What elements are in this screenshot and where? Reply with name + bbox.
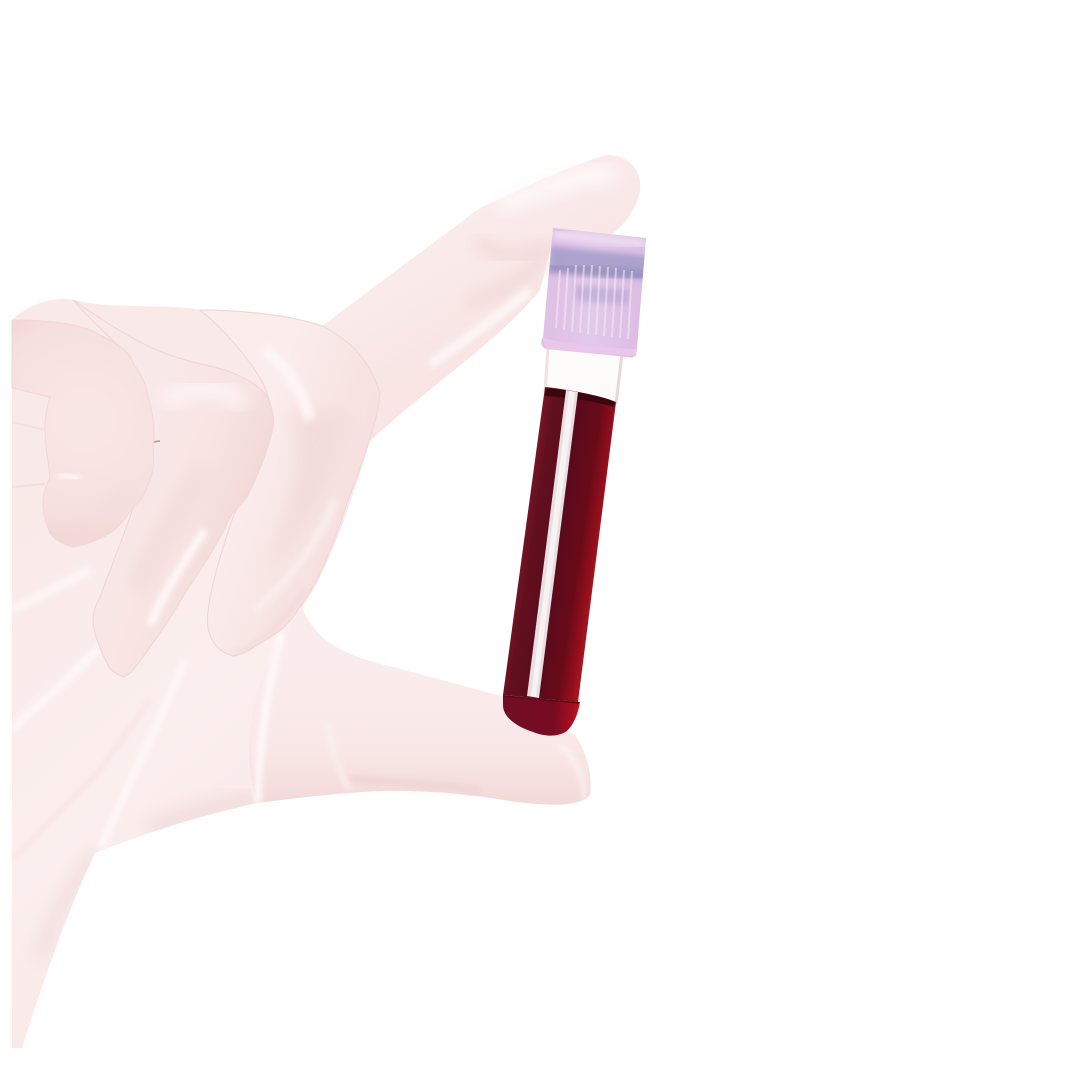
glove: full silhouette base bbox=[12, 299, 370, 1044]
test tube: glass highlight stripe bbox=[527, 390, 578, 698]
test tube: blood column bbox=[503, 387, 616, 702]
glove: thumb bbox=[249, 607, 590, 805]
glove: third finger bbox=[200, 310, 380, 656]
test tube: purple cap bbox=[541, 228, 650, 358]
illustration: gloved hand holding blood tube bbox=[12, 155, 646, 1048]
glove: middle finger bbox=[73, 300, 273, 677]
test tube: rounded base bbox=[503, 695, 580, 736]
glove: palm and wrist bbox=[12, 568, 252, 850]
glove: curled little finger bbox=[12, 320, 154, 547]
glove: index finger bbox=[322, 155, 640, 441]
test tube: glass neck bbox=[545, 345, 622, 405]
